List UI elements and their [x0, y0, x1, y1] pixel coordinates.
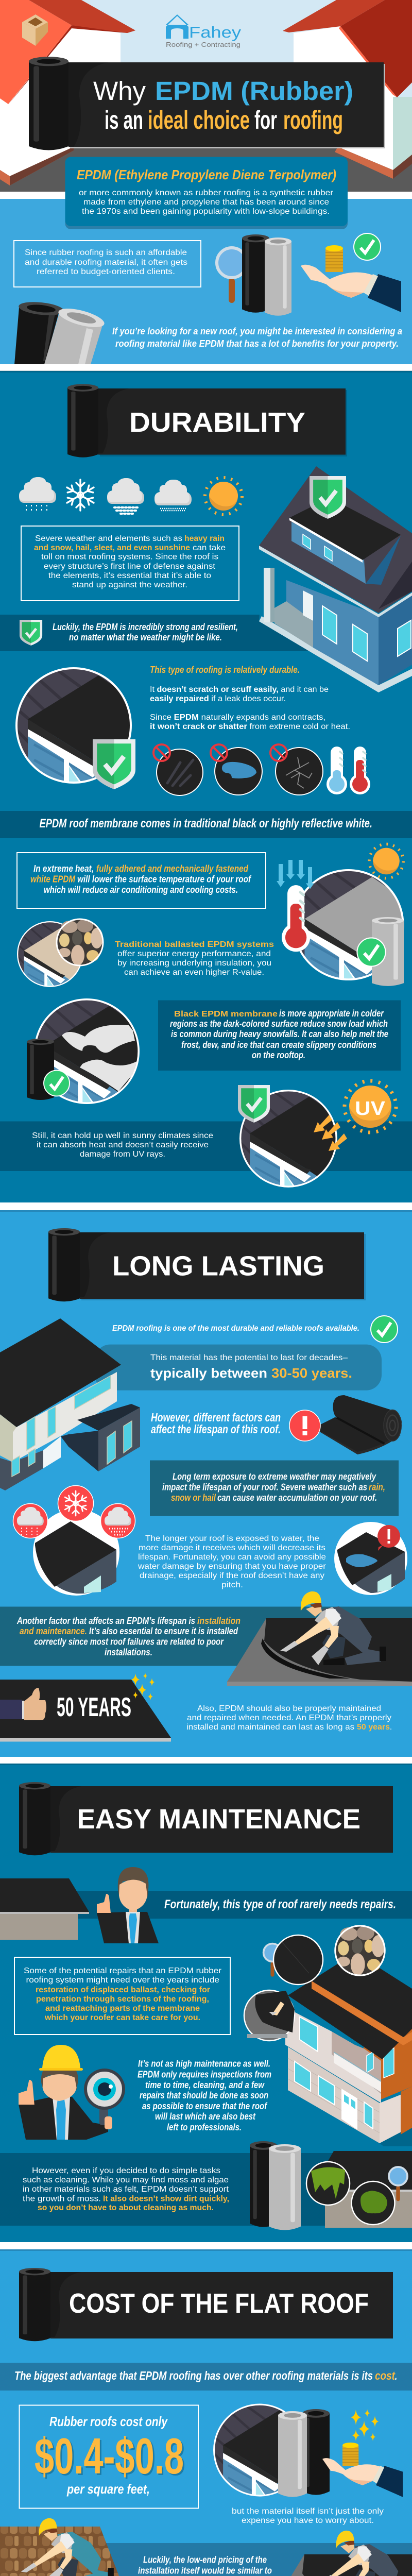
icon: rolls	[250, 2141, 301, 2230]
expense text: expense you have to worry about.	[242, 2516, 374, 2525]
inspections text: repairs that should be done as soon	[140, 2090, 268, 2100]
50 years roof	[0, 1673, 171, 1741]
house door	[341, 2089, 357, 2130]
inspections text: left to professionals.	[167, 2122, 242, 2132]
black membrane box: Black EPDM membrane	[174, 1010, 278, 1019]
exposure box: Long term exposure to extreme weather may negatively	[173, 1471, 376, 1482]
black membrane box	[158, 1001, 401, 1071]
weather text box: the elements, it’s essential that it’s able to	[48, 571, 211, 580]
lifespan pill: This material has the potential to last for decades–	[150, 1353, 348, 1362]
right house	[283, 0, 412, 179]
icon: sleet	[154, 480, 192, 511]
membrane colour band	[0, 811, 412, 838]
sunny climate text: it can absorb heat and doesn’t easily receive	[37, 1141, 209, 1149]
section banner: durability	[67, 384, 347, 457]
lifespan pill: 30-50 years.	[271, 1365, 352, 1381]
section banner: cost	[19, 2268, 393, 2341]
logo	[166, 14, 242, 48]
water damage text: drainage, especially if the roof doesn’t have any	[140, 1571, 324, 1580]
water damage text	[138, 1534, 327, 1589]
EPDM roof with worker	[270, 2531, 412, 2576]
icon: magnifier	[389, 2167, 407, 2201]
repairs text box: penetration through sections of the roofing,	[36, 1995, 209, 2004]
house windows	[295, 2017, 373, 2129]
inspections text: as possible to ensure that the roof	[142, 2101, 268, 2111]
weather text box: heavy rain	[184, 534, 225, 543]
inspection circles	[244, 1926, 385, 2041]
reliable statement: EPDM roofing is one of the most durable and reliable roofs available.	[112, 1324, 359, 1333]
title line 2	[105, 106, 343, 134]
icon: rubber roll	[314, 1395, 402, 1454]
installation band: and maintenance.	[20, 1626, 87, 1636]
sunny climate text: damage from UV rays.	[80, 1150, 165, 1159]
inspections text: It’s not as high maintenance as well.	[138, 2059, 270, 2069]
shingle roof with worker	[0, 2518, 129, 2576]
sparkles	[131, 1673, 155, 1700]
icon: rain	[19, 477, 56, 513]
installation band: installations.	[105, 1647, 152, 1657]
definition heading: EPDM (Ethylene Propylene Diene Terpolymer)	[77, 167, 336, 182]
factors statement: affect the lifespan of this roof.	[151, 1422, 281, 1436]
ballasted text	[115, 940, 274, 977]
inspections text: will last which are also best	[155, 2111, 256, 2122]
title line 1: Why	[93, 76, 146, 106]
house ground shadow	[380, 2126, 412, 2146]
resilient text	[53, 622, 238, 642]
panel: long lasting	[0, 1202, 412, 1757]
maintenance text: .	[390, 1723, 392, 1732]
moss roof building	[306, 2151, 412, 2228]
factors statement	[151, 1411, 281, 1436]
extreme heat text box: white EPDM	[30, 874, 76, 884]
road	[0, 118, 412, 192]
black membrane box: is more appropriate in colder	[279, 1008, 384, 1019]
house wall	[286, 580, 379, 685]
cleaning text: so you don’t have to about cleaning as much.	[38, 2204, 214, 2212]
icon: warning bubble	[377, 1525, 400, 1551]
icon: hail	[107, 478, 144, 514]
affordable callout box	[14, 241, 201, 287]
maintenance text: Also, EPDM should also be properly maintained	[197, 1704, 381, 1713]
advantage band: .	[395, 2369, 397, 2382]
man in suit	[97, 1867, 159, 1943]
repairs text box: and reattaching parts of the membrane	[45, 2004, 200, 2013]
section banner: durability: DURABILITY	[129, 407, 305, 438]
price figure: $0.4-$0.8	[36, 2429, 185, 2486]
house dormer	[291, 522, 366, 584]
icon: snow badge	[58, 1486, 94, 1521]
blue house with shield	[259, 466, 412, 692]
inspection circle: ballast	[335, 1926, 385, 1975]
exposure box	[150, 1460, 399, 1516]
exposure box: impact the lifespan of your roof. Severe weather such as	[162, 1482, 367, 1492]
weather text box: can take	[193, 544, 226, 552]
house shingle roof	[259, 466, 412, 613]
weather text box: Severe weather and elements such as	[35, 534, 182, 543]
icon: scuffs	[153, 744, 203, 795]
icon: UV sun: UV	[355, 1098, 386, 1120]
icon: tilted rolls	[14, 300, 106, 364]
repairs text box: restoration of displaced ballast, checking for	[36, 1986, 210, 1994]
title line 2: is an	[105, 106, 143, 134]
moss circle: patch	[351, 2181, 394, 2225]
weather text box: toll on most roofing systems. Since the roof is	[41, 552, 218, 562]
sunny climate text: Still, it can hold up well in sunny climates since	[32, 1131, 213, 1140]
definition text: or more commonly known as rubber roofing is a synthetic rubber	[79, 189, 334, 197]
icon: rain badge	[13, 1503, 47, 1538]
cleaning text: such as cleaning. While you may find moss and algae	[23, 2176, 229, 2184]
roof circle with rolls and coins	[209, 2400, 403, 2502]
title line 2: for	[254, 106, 277, 134]
icon: cold thermometer	[327, 747, 347, 794]
extreme heat text box: In extreme heat,	[33, 863, 94, 874]
head and hat	[39, 2045, 83, 2101]
icon: puddle	[211, 744, 262, 795]
section banner: cost: COST OF THE FLAT ROOF	[69, 2288, 369, 2319]
factors statement: However, different factors can	[151, 1411, 281, 1424]
resilient text: Luckily, the EPDM is incredibly strong and resilient,	[53, 622, 238, 632]
sunny climate band	[0, 1121, 412, 1171]
installation band: correctly since most roof failures are related to poor	[34, 1636, 224, 1647]
ballasted text: offer superior energy performance, and	[117, 950, 271, 958]
exposure box: snow or hail	[171, 1493, 216, 1503]
expense text: but the material itself isn’t just the only	[232, 2507, 384, 2516]
advantage band	[0, 2363, 412, 2391]
relative durability text: It doesn’t scratch or scuff easily, and it can be	[150, 685, 329, 694]
icon: coins on hand	[322, 2443, 403, 2497]
exposure box: rain,	[369, 1482, 385, 1492]
affordable callout box: referred to budget-oriented clients.	[37, 267, 175, 276]
worker	[280, 1591, 386, 1665]
roof with installer	[227, 1591, 412, 1686]
maintenance text: installed and maintained can last as long as	[186, 1723, 354, 1732]
maintenance text: 50 years	[357, 1723, 390, 1732]
roof close-up circle with shield	[10, 662, 139, 791]
panel: introduction	[0, 157, 412, 371]
black roof house	[0, 1318, 140, 1490]
section banner: easy maintenance: EASY MAINTENANCE	[77, 1804, 360, 1835]
cleaning text	[23, 2166, 229, 2212]
price box: Rubber roofs cost only	[49, 2414, 168, 2429]
weather text box: stand up against the weather.	[72, 581, 187, 589]
damage icons	[153, 744, 370, 795]
lifespan pill: typically between	[150, 1365, 267, 1381]
advantage band: cost	[375, 2369, 396, 2382]
UV roof illustration	[235, 1081, 396, 1194]
installation band: Another factor that affects an EPDM’s lifespan is	[16, 1616, 195, 1626]
extreme heat text box	[17, 853, 266, 908]
repairs text box: which your roofer can take care for you.	[44, 2013, 200, 2022]
weather text box	[21, 526, 239, 601]
reliable statement	[112, 1316, 398, 1343]
affordable callout box: and durable roofing material, it often gets	[25, 258, 187, 267]
icon: check	[357, 938, 386, 967]
icon: white roll	[372, 917, 404, 986]
title line 1: EPDM (Rubber)	[155, 76, 353, 106]
icon: hot thermometer	[350, 747, 370, 794]
ballasted text: by increasing underlying insulation, you	[117, 959, 271, 968]
title line 2: ideal choice	[148, 106, 250, 134]
worker	[318, 2531, 411, 2576]
panel: cost of the flat roof	[0, 2242, 412, 2576]
inspections text	[138, 2059, 271, 2132]
left house	[0, 0, 135, 185]
inspections text: EPDM only requires inspections from	[138, 2069, 271, 2079]
installation price text: installation itself would be similar to	[138, 2566, 272, 2576]
relative durability text: Since EPDM naturally expands and contracts,	[150, 713, 325, 722]
house lower siding	[288, 2047, 380, 2143]
cleaning text: the growth of moss.	[23, 2195, 101, 2203]
logo wordmark: Fahey	[189, 23, 242, 41]
definition text	[79, 189, 334, 216]
icon: check	[371, 1316, 398, 1343]
icon: magnifier	[264, 1944, 281, 1977]
icon: shield	[20, 620, 42, 646]
inspection circle: membrane	[273, 1935, 323, 1985]
dark band: resilient	[0, 615, 412, 651]
definition text: made from ethylene and propylene that has been around since	[83, 198, 329, 207]
cleaning text: It also doesn’t show dirt quickly,	[103, 2195, 229, 2203]
resilient text: no matter what the weather might be like.	[69, 632, 222, 642]
icon: UV sun	[345, 1081, 396, 1132]
relative durability text	[150, 665, 350, 731]
house windows	[12, 1376, 132, 1477]
house windows	[322, 606, 337, 644]
installation band: installation	[197, 1616, 241, 1626]
inspector man	[19, 2045, 124, 2140]
repairs text box	[14, 1957, 230, 2035]
house upper wall	[285, 2007, 381, 2103]
icon: snowflake	[65, 480, 96, 511]
ballasted text: can achieve an even higher R-value.	[124, 968, 264, 977]
extreme heat text box: fully adhered and mechanically fastened	[96, 863, 249, 874]
icon: cracks	[270, 744, 323, 795]
icon: warning	[289, 1410, 320, 1441]
icon: sun	[205, 478, 242, 515]
house roof	[288, 1953, 412, 2059]
expense text	[232, 2507, 384, 2525]
section banner: long lasting: LONG LASTING	[112, 1251, 324, 1282]
installation band	[0, 1606, 412, 1666]
icon: shield on house	[310, 476, 346, 519]
exposure box: can cause water accumulation on your roof.	[217, 1493, 377, 1503]
installation price text	[138, 2554, 272, 2576]
weather text box: every structure’s first line of defense against	[44, 562, 216, 571]
maintenance text	[186, 1704, 392, 1732]
suit	[19, 2097, 108, 2140]
dark band: rare repairs	[0, 1891, 412, 1919]
icon: eye magnifier	[85, 2070, 124, 2129]
repairs text box: roofing system might need over the years include	[26, 1976, 219, 1985]
price box	[20, 2405, 198, 2508]
chimney	[22, 14, 48, 46]
icon: check	[354, 233, 381, 260]
ballasted text: Traditional ballasted EPDM systems	[115, 940, 274, 949]
water damage text: more damage it receives which will decrease its	[139, 1544, 325, 1552]
moss circle: streaks	[306, 2162, 350, 2205]
roof with weather illustration	[13, 1486, 135, 1596]
extreme heat text box: will lower the surface temperature of your roof	[77, 874, 252, 884]
section banner: easy maintenance	[19, 1782, 393, 1855]
weather text box: and snow, hail, sleet, and even sunshine	[34, 544, 190, 552]
icon: thumbs up	[0, 1688, 46, 1720]
repairs text box: Some of the potential repairs that an EPDM rubber	[24, 1967, 222, 1975]
new roof statement	[112, 326, 402, 349]
water damage text: lifespan. Fortunately, you can avoid any possible	[138, 1553, 326, 1562]
logo tagline: Roofing + Contracting	[166, 41, 241, 48]
affordable callout box: Since rubber roofing is such an affordable	[25, 248, 187, 257]
section banner: long lasting	[48, 1228, 366, 1301]
sparkles	[350, 2409, 379, 2441]
panel: easy maintenance	[0, 1757, 412, 2242]
water damage text: pitch.	[221, 1581, 243, 1589]
resilient statement	[20, 620, 238, 646]
maintenance text: and repaired when needed. An EPDM that’s properly	[187, 1714, 391, 1722]
title banner	[29, 57, 385, 150]
relative durability text: easily repaired if a leak does occur.	[150, 694, 286, 703]
logo icon	[166, 14, 188, 39]
arrows	[277, 860, 314, 889]
black membrane box: frost, dew, and ice that can create slippery conditions	[181, 1040, 376, 1050]
relative durability text: it won’t crack or shatter from extreme cold or heat.	[150, 722, 350, 731]
installation price band	[103, 2543, 412, 2576]
price figure	[35, 2428, 185, 2486]
small flat roof building	[0, 1878, 89, 1940]
icon: magnifier and rolls	[217, 234, 291, 316]
panel: header with houses	[0, 0, 412, 192]
house balcony railing	[334, 2052, 381, 2092]
roof puddle illustration	[334, 1522, 407, 1595]
installation band: It’s also essential to ensure it is installed	[89, 1626, 238, 1636]
installation price text: Luckily, the low-end pricing of the	[143, 2554, 267, 2565]
icon: UV arrows	[314, 1115, 347, 1151]
ballasted roof illustration	[14, 918, 103, 991]
relative durability text: This type of roofing is relatively durable.	[150, 665, 300, 675]
white roof illustration	[277, 844, 411, 987]
inspection circle: reattaching	[244, 1990, 295, 2041]
weather icons	[19, 477, 242, 515]
cleaning text: in other materials such as felt, EPDM doesn’t support	[23, 2185, 229, 2194]
price box: per square feet,	[66, 2481, 150, 2497]
worker	[21, 2518, 114, 2576]
snowy black roof illustration	[27, 994, 146, 1111]
water damage text: The longer your roof is exposed to water, the	[145, 1534, 319, 1543]
icon: thermometer	[282, 885, 310, 952]
water damage text: water damage by ensuring that you have proper	[138, 1562, 327, 1571]
cleaning band	[0, 2153, 412, 2226]
inspections text: time to time, cleaning, and a few	[145, 2080, 265, 2090]
sunny climate text	[32, 1131, 213, 1159]
black membrane box: on the rooftop.	[252, 1050, 305, 1060]
definition box	[65, 157, 348, 229]
lifespan pill	[95, 1345, 382, 1391]
pointing hand	[19, 2080, 35, 2105]
price figure: $0.4-$0.8	[35, 2428, 184, 2484]
icon: coins on hand	[301, 245, 401, 312]
panel: durability	[0, 371, 412, 1202]
cleaning text: However, even if you decided to do simple tasks	[32, 2166, 220, 2175]
extreme heat text box: which will reduce air conditioning and cooling costs.	[44, 885, 238, 895]
orange trim house	[244, 1926, 412, 2146]
definition text: the 1970s and been gaining popularity with low-slope buildings.	[82, 207, 330, 216]
title line 2: roofing	[283, 106, 343, 134]
icon: hail badge	[101, 1503, 135, 1538]
50 years label: 50 YEARS	[57, 1692, 131, 1722]
